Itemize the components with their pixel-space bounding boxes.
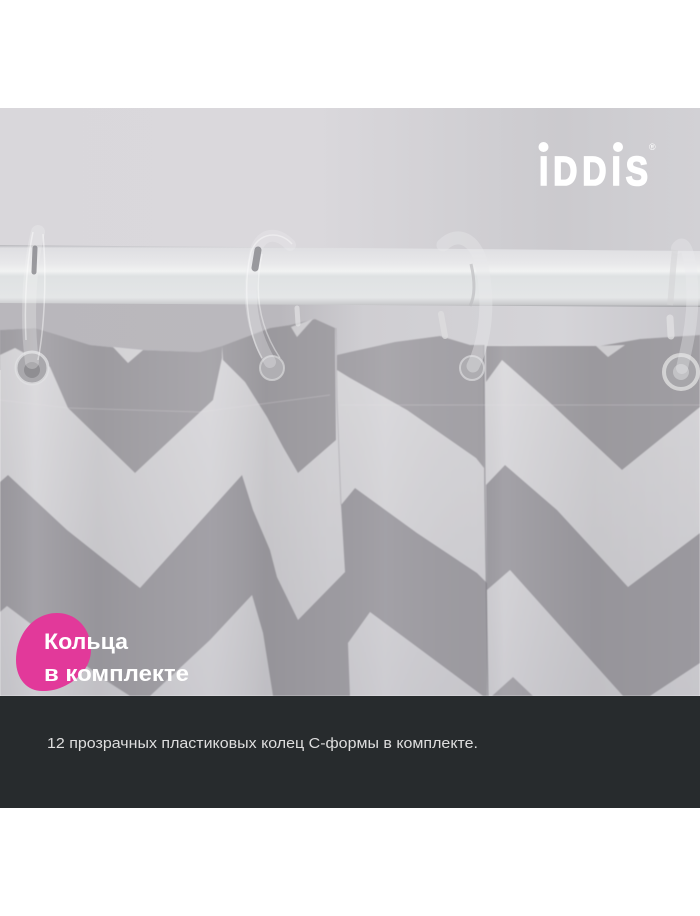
curtain fabric <box>0 318 700 696</box>
shadow area below rod <box>0 300 700 370</box>
peg 4 <box>670 318 671 336</box>
ring 1 with eyelet <box>16 232 48 384</box>
eyelet 4 <box>664 355 698 389</box>
chevron: top middle <box>222 319 336 473</box>
notch: left top <box>113 347 143 363</box>
notch: middle top <box>291 319 313 337</box>
fabric fold shading <box>0 318 700 696</box>
heading line 1: Кольца <box>44 629 129 654</box>
pink blob <box>16 613 91 691</box>
callout: pink blob with heading <box>16 613 189 691</box>
chevron: top centre right <box>337 336 484 468</box>
fold line left <box>336 328 341 505</box>
wall above rod <box>0 108 700 253</box>
ring 4 with eyelet <box>664 245 698 389</box>
eyelet 2 <box>260 356 284 380</box>
eyelet 3 <box>460 356 484 380</box>
logo: IDDIS <box>538 142 656 194</box>
band background <box>0 696 700 808</box>
logo dot 1 <box>538 142 548 152</box>
curtain base <box>0 319 700 696</box>
ring 3 with eyelet <box>441 238 486 380</box>
chevron: top left <box>0 328 222 473</box>
photo: curtain on rod <box>0 108 700 696</box>
chevron: top right <box>486 335 700 470</box>
chevron: bottom small <box>492 677 533 696</box>
logo registered mark: ® <box>649 142 656 152</box>
eyelet 1 <box>16 352 48 384</box>
fold line right <box>484 345 488 696</box>
chevron: large left and middle <box>0 475 487 696</box>
peg 3 <box>441 314 445 336</box>
heading line 2: в комплекте <box>44 661 189 686</box>
peg 2 <box>297 308 298 324</box>
chevron: large right <box>486 465 700 696</box>
shower rod <box>0 245 700 307</box>
dark description band <box>0 696 700 808</box>
hem stitching <box>0 395 700 412</box>
notch: right top <box>596 345 625 357</box>
logo dot 2 <box>613 142 623 152</box>
description text: 12 прозрачных пластиковых колец С-формы в комплекте. <box>47 736 478 752</box>
infographic canvas <box>0 108 700 808</box>
logo wordmark: IDDIS <box>539 148 648 194</box>
ring 2 with eyelet <box>247 235 298 380</box>
